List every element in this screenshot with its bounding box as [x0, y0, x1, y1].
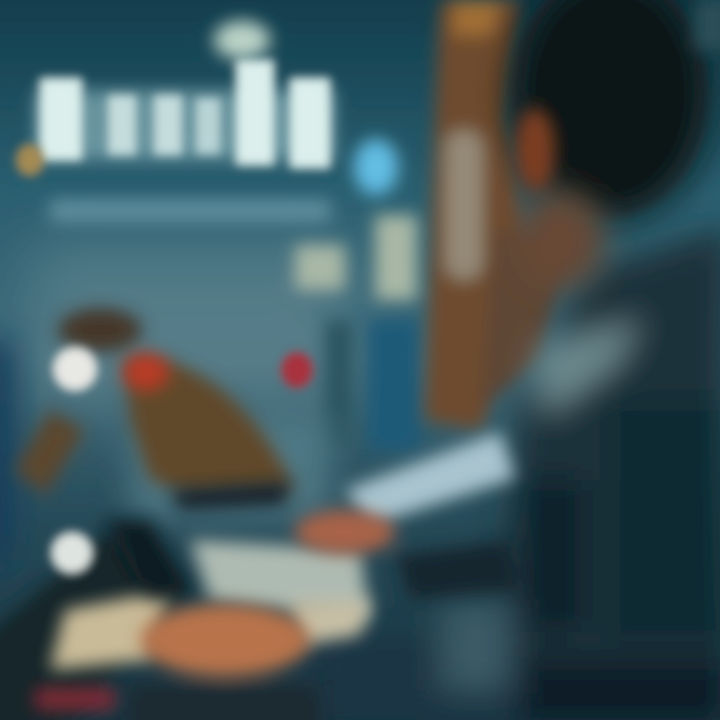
figure: lower hand: [130, 604, 320, 720]
figure: man's back and shirt: [310, 225, 720, 720]
icon: orange accent: [16, 144, 44, 176]
icon: red accent right: [281, 352, 313, 388]
figure: man's head: [510, 0, 720, 290]
icon: blue glow: [354, 139, 398, 195]
panel: light cream signs: [295, 215, 417, 300]
icon: white circle upper: [53, 347, 97, 391]
icon: red accent left: [123, 353, 169, 391]
panel: desk and equipment: [0, 520, 370, 720]
figure: brown crouched figure: [15, 308, 295, 510]
title: blurred headline: [35, 60, 335, 168]
figure: pale blue sleeve: [345, 432, 515, 525]
text block: blurred subtitle: [50, 200, 330, 222]
icon: top emblem: [214, 21, 270, 59]
icon: red bottom label: [35, 688, 115, 710]
figure: upper hand: [295, 510, 520, 600]
icon: white circle lower: [51, 532, 93, 574]
panel: wooden column: [425, 0, 570, 430]
